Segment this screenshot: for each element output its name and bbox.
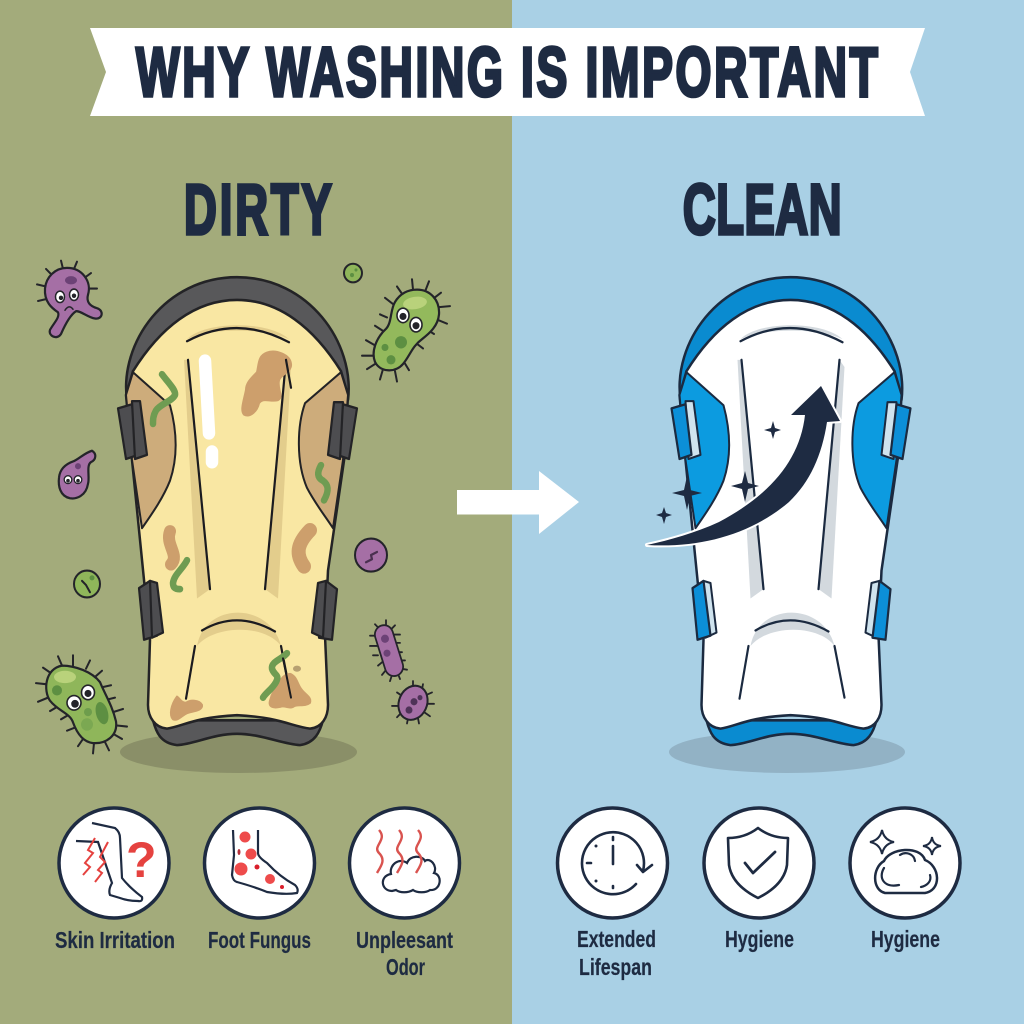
label: extended lifespan: Extended xyxy=(577,926,656,952)
benefit: skin irritation xyxy=(55,808,175,953)
icon: shield check xyxy=(704,808,814,918)
heading: dirty: DIRTY xyxy=(184,170,332,249)
panel: dirty background xyxy=(0,0,512,1024)
benefit: unpleasant odor xyxy=(350,808,460,980)
germ: purple rod xyxy=(370,620,407,681)
icon: sparkles xyxy=(656,421,781,524)
germ: big green bean bottom left xyxy=(36,655,127,753)
icon: odor cloud xyxy=(350,808,460,918)
germs cluster xyxy=(36,261,450,753)
benefit: hygiene soap xyxy=(850,808,960,952)
germ: small green dot top xyxy=(344,264,362,282)
label: unpleasant odor: Unpleesant xyxy=(356,927,453,953)
label: extended lifespan: Lifespan xyxy=(579,954,652,980)
arrow: dirty to clean xyxy=(457,471,579,534)
benefit: foot fungus xyxy=(204,808,314,953)
label: skin irritation: Skin Irritation xyxy=(55,927,175,953)
panel: clean background xyxy=(512,0,1024,1024)
label: foot fungus: Foot Fungus xyxy=(208,927,311,953)
shadow under dirty shin guard xyxy=(120,731,357,773)
clean shin guard xyxy=(672,277,910,745)
icon: irritated leg: ? xyxy=(126,832,157,888)
germ: purple circle right xyxy=(355,539,387,572)
germ: purple blob top left xyxy=(37,261,102,337)
benefit: hygiene shield xyxy=(704,808,814,952)
icon: foot with spots xyxy=(204,808,314,918)
label: extended lifespan xyxy=(577,926,656,980)
icon: irritated leg xyxy=(59,808,169,918)
germ: green circle left xyxy=(74,571,100,597)
label: unpleasant odor: Odor xyxy=(386,954,425,980)
label: unpleasant odor xyxy=(356,927,453,980)
title banner xyxy=(90,28,925,116)
germ: small purple spiky xyxy=(392,681,434,725)
dirty shin guard xyxy=(118,277,357,745)
label: hygiene: Hygiene xyxy=(871,926,940,952)
germ: green bean top right xyxy=(362,279,450,382)
icon: soap and sparkles xyxy=(850,808,960,918)
heading: clean: CLEAN xyxy=(683,170,842,249)
label: hygiene: Hygiene xyxy=(725,926,794,952)
benefit: extended lifespan xyxy=(558,808,668,980)
germ: purple teardrop xyxy=(59,451,95,498)
icon: clock xyxy=(558,808,668,918)
icon: cleaning swoosh arrow xyxy=(647,386,840,545)
title: WHY WASHING IS IMPORTANT xyxy=(136,32,878,111)
shadow under clean shin guard xyxy=(669,731,905,773)
